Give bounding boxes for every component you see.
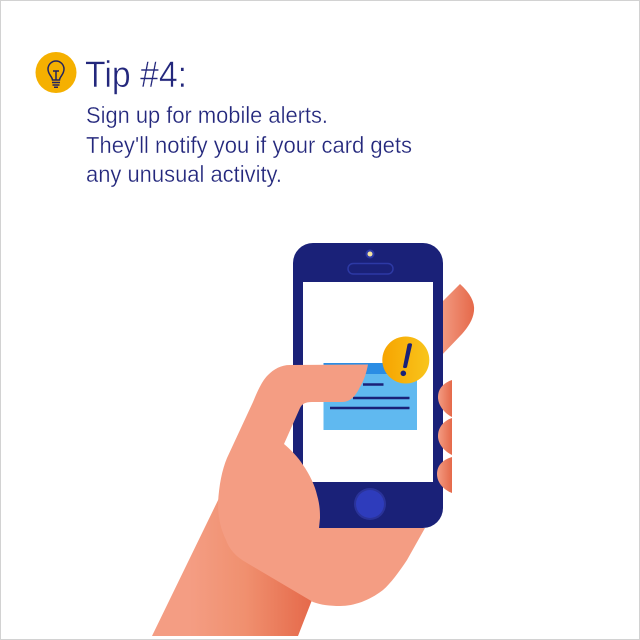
alert badge [382,336,429,384]
phone body [293,243,443,528]
phone [293,243,443,528]
text block: tip description [86,102,412,187]
right fingers [437,380,452,493]
text block: tip description: any unusual activity. [86,161,282,187]
camera [366,250,374,258]
home button [354,488,386,520]
notification card [324,363,417,430]
forearm [152,492,330,636]
icon: light bulb [36,52,76,93]
illustration: hand holding phone [152,243,474,636]
title: Tip #4: [85,54,187,95]
text block: tip description: They'll notify you if your card gets [86,132,412,158]
palm and thumb [218,364,425,606]
index finger behind phone [440,284,474,357]
speaker [348,264,393,274]
text block: tip description: Sign up for mobile alerts. [86,102,328,128]
phone screen [303,282,433,482]
